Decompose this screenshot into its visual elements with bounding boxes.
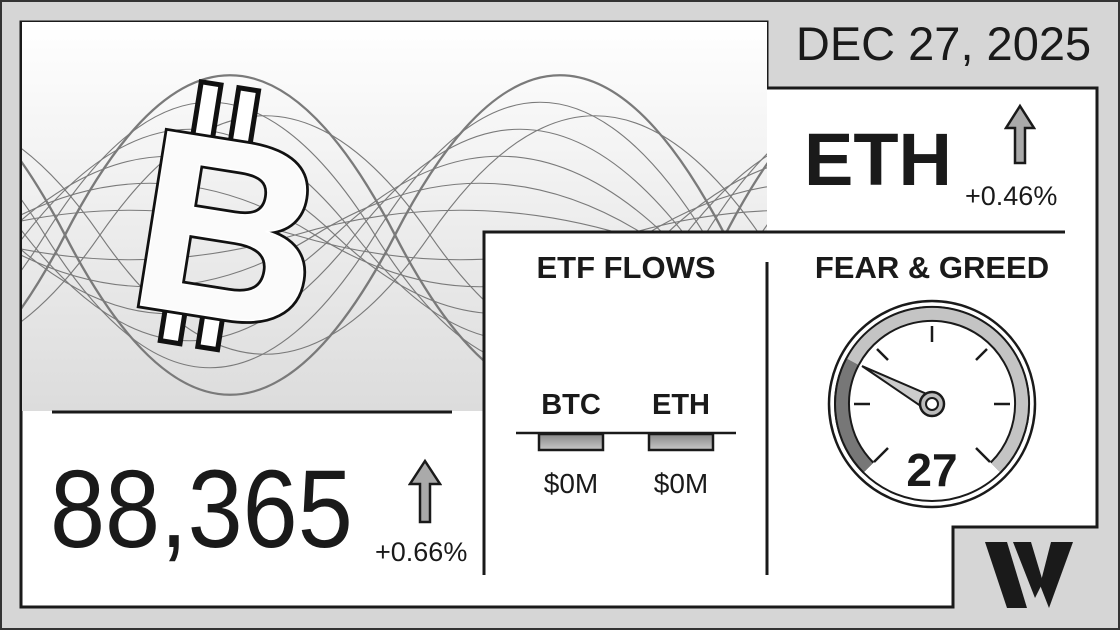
ETH label: ETH bbox=[804, 118, 952, 201]
icon: up arrow BTC bbox=[408, 458, 442, 524]
ETH change: +0.46% bbox=[965, 181, 1057, 211]
logo: W bbox=[985, 542, 1073, 608]
price: 88,365 bbox=[50, 448, 353, 571]
bar chart: $0M bbox=[654, 468, 708, 499]
bar chart bbox=[516, 389, 736, 499]
bar chart: ETH bbox=[652, 389, 710, 421]
icon: bitcoin: B bbox=[115, 75, 342, 386]
ETH block bbox=[804, 104, 1057, 211]
panel: fear & greed bbox=[815, 250, 1049, 508]
icon: bitcoin: B bbox=[115, 75, 342, 386]
BTC change: +0.66% bbox=[375, 537, 467, 567]
bar chart: $0M bbox=[544, 468, 598, 499]
date: DEC 27, 2025 bbox=[796, 17, 1091, 70]
gauge: 27 bbox=[906, 444, 958, 496]
icon: up arrow ETH bbox=[1004, 104, 1036, 164]
heading: FEAR & GREED bbox=[815, 250, 1049, 285]
panel lines bbox=[484, 232, 1084, 525]
panel: ETF flows bbox=[516, 250, 736, 499]
heading: ETF FLOWS bbox=[536, 250, 716, 285]
bar chart: BTC bbox=[541, 389, 601, 421]
wave background bbox=[22, 22, 767, 411]
BTC price bbox=[50, 448, 467, 571]
